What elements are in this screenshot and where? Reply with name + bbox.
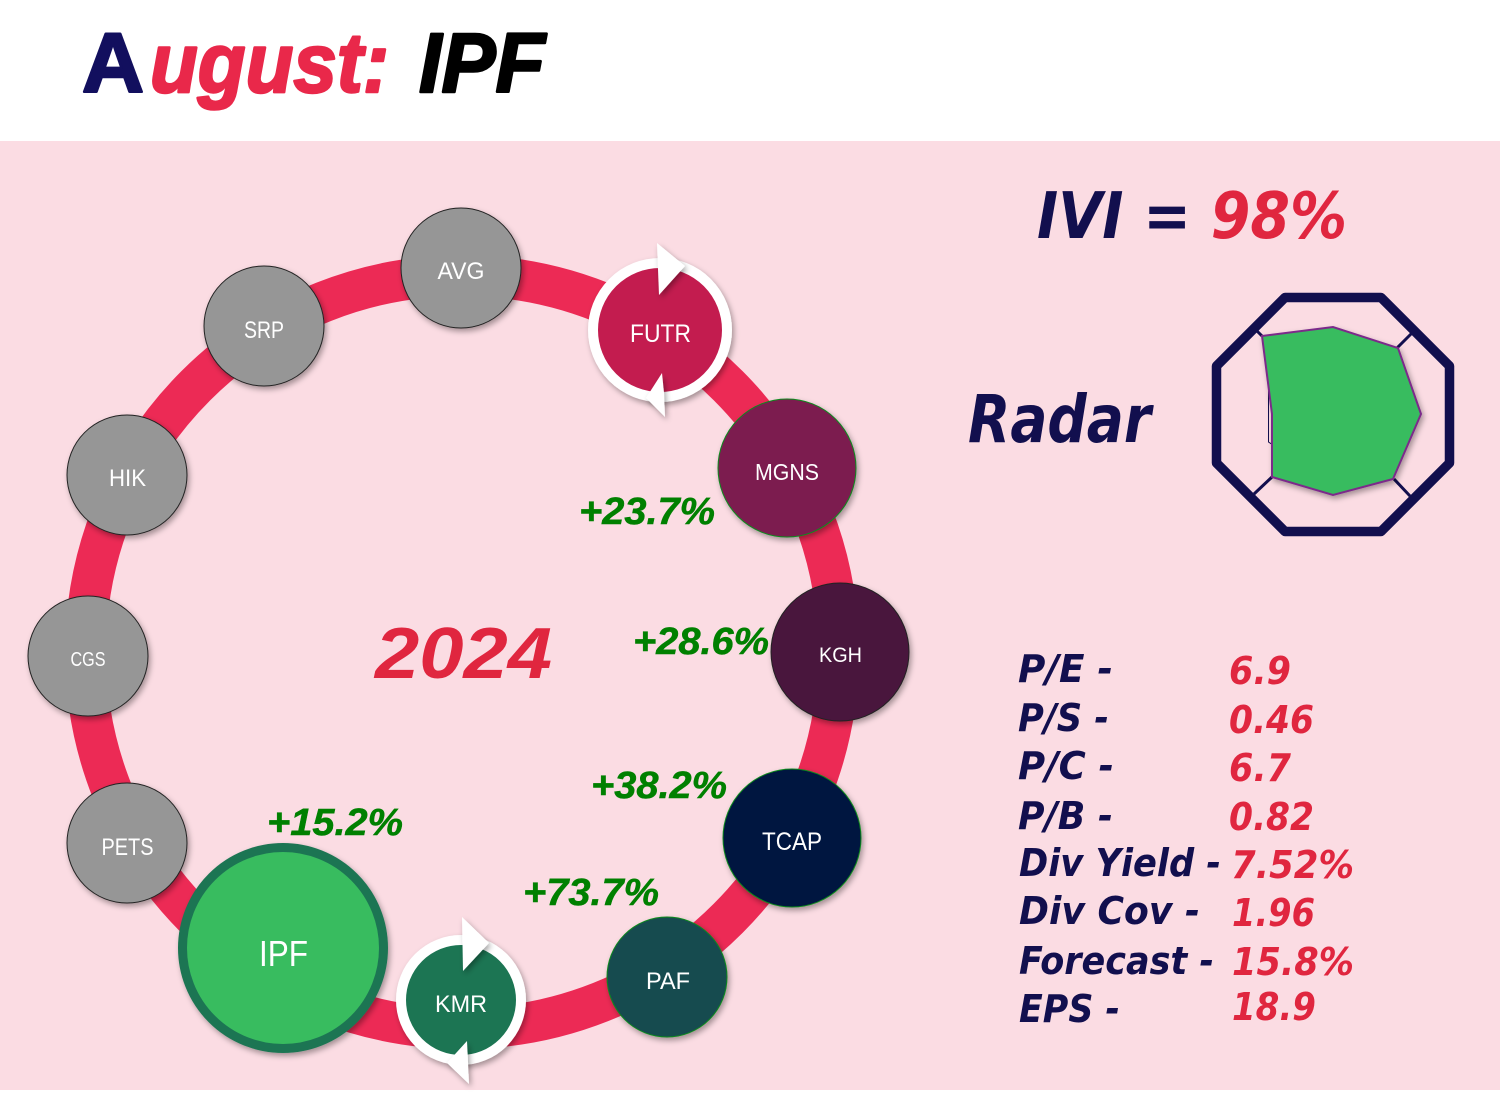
node: CGS: [28, 596, 148, 716]
metrics table: 0.46: [1229, 698, 1314, 742]
node: PETS: [67, 783, 187, 903]
title: ugust:: [150, 16, 389, 110]
node: HIK: HIK: [109, 465, 146, 492]
metrics table: Div Cov -: [1019, 889, 1200, 933]
node: SRP: [204, 266, 324, 386]
node: IPF: IPF: [259, 933, 308, 974]
metrics table: P/B -: [1018, 794, 1113, 838]
icon: FUTR cycle arrows: [646, 243, 685, 417]
node: PETS: PETS: [102, 834, 154, 861]
metrics table: EPS -: [1019, 987, 1120, 1031]
gain label: PAF: +73.7%: [523, 872, 659, 914]
metrics table: P/C -: [1018, 744, 1114, 788]
radar label: Radar: [968, 381, 1154, 458]
node: AVG: [401, 208, 521, 328]
node: PAF: PAF: [646, 968, 690, 995]
node: IPF: [182, 848, 384, 1048]
gain label: MGNS: +23.7%: [579, 491, 715, 533]
gain label: TCAP: +38.2%: [591, 765, 727, 807]
title: [82, 16, 548, 110]
title: A: [82, 16, 144, 110]
node: MGNS: [718, 399, 856, 537]
node: TCAP: TCAP: [762, 828, 822, 856]
node: AVG: AVG: [438, 258, 484, 285]
metrics table: 7.52%: [1231, 843, 1354, 887]
node: FUTR: FUTR: [630, 320, 691, 348]
metrics table: P/S -: [1018, 696, 1109, 740]
metrics table: Forecast -: [1019, 939, 1214, 983]
title: IPF: [419, 16, 548, 110]
metrics table: 15.8%: [1232, 940, 1354, 984]
node: HIK: [67, 415, 187, 535]
metrics table: [1018, 647, 1354, 1031]
radar data polygon: [1262, 327, 1421, 495]
metrics table: 6.7: [1229, 746, 1292, 790]
metrics table: Div Yield -: [1019, 841, 1221, 885]
node: MGNS: MGNS: [755, 459, 819, 485]
metrics table: 6.9: [1229, 649, 1291, 693]
node: KGH: [771, 583, 909, 721]
gain label: IPF: +15.2%: [267, 802, 403, 844]
gain label: KGH: +28.6%: [633, 621, 769, 663]
radar chart: [1216, 298, 1450, 532]
node: FUTR: [593, 243, 727, 417]
metrics table: 0.82: [1229, 795, 1314, 839]
node: KGH: KGH: [819, 644, 862, 667]
node: SRP: SRP: [244, 317, 284, 344]
ring track: [86, 276, 838, 1028]
metrics table: 1.96: [1232, 891, 1315, 935]
node: PAF: [607, 917, 727, 1037]
metrics table: P/E -: [1018, 647, 1113, 691]
metrics table: 18.9: [1232, 985, 1316, 1029]
node: KMR: KMR: [435, 991, 487, 1018]
icon: KMR cycle arrows: [447, 917, 489, 1084]
node: KMR: [401, 917, 521, 1084]
IVI score: IVI = 98%: [1037, 180, 1347, 254]
node: TCAP: [723, 769, 861, 907]
node: CGS: CGS: [70, 649, 106, 671]
center year: 2024: [373, 614, 552, 694]
